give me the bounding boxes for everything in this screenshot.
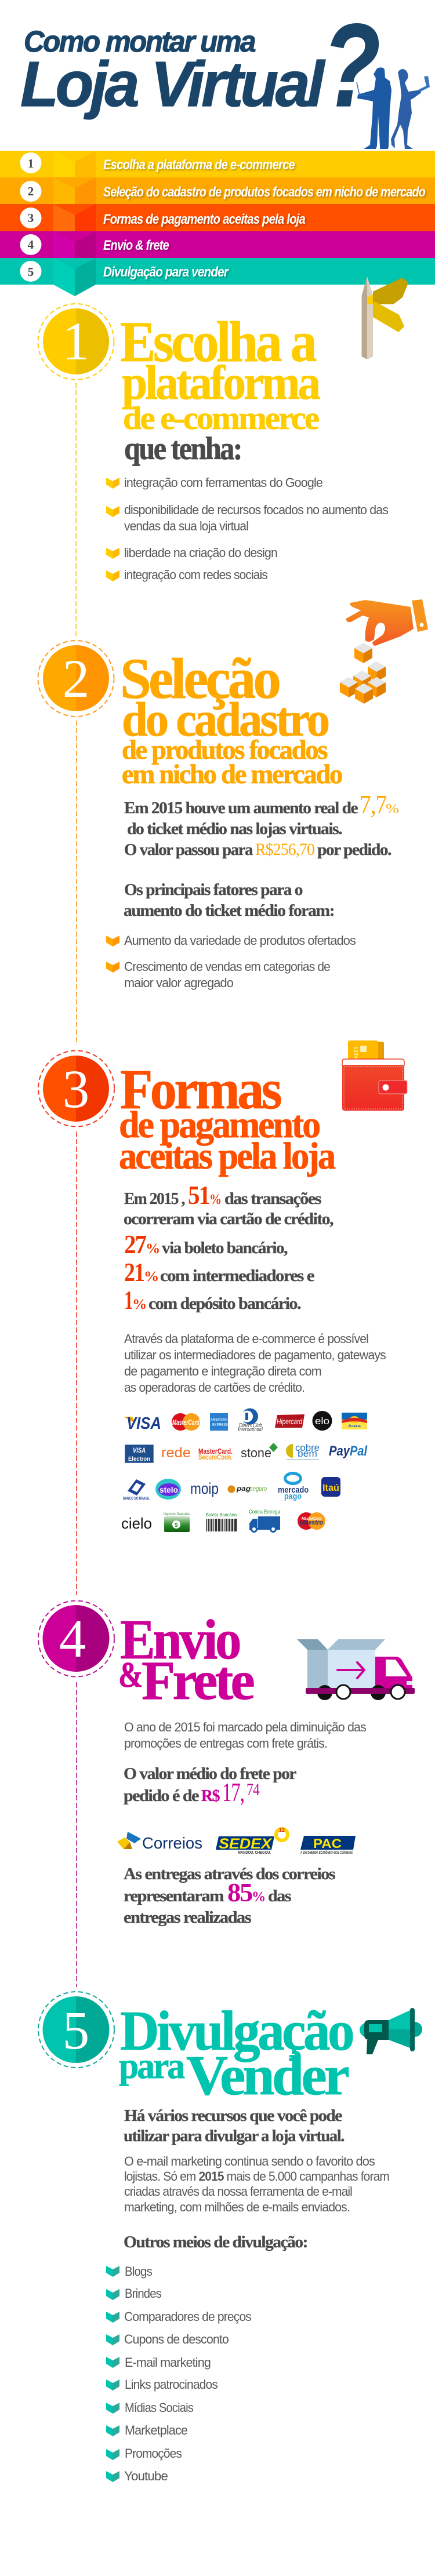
icon: delivery truck [297,1639,415,1700]
logo: Sedex: 12 [279,1827,285,1833]
freight value: 74 [246,1780,260,1799]
stats paragraph: 1 [124,1285,132,1315]
logo: Hipercard [275,1414,304,1428]
badge 5: 5 [63,2001,89,2061]
logo: PAC [300,1836,356,1855]
body text 3: de pagamento e integração direta com [124,1364,321,1378]
band 4: Envio & frete [103,238,169,253]
heading 1 [120,310,320,466]
logo: PAC: A ENCOMENDA ECONÔMICA DOS CORREIOS [300,1850,353,1855]
body text 3 [124,1331,386,1395]
logo: Sedex: SEDEX [219,1836,272,1852]
logo: Mercado Pago: pago [284,1491,302,1501]
logo: PagSeguro: pag [236,1485,251,1493]
badge 4 [38,1601,114,1676]
correios stat: % [252,1889,265,1905]
icon: megaphone [360,2008,422,2054]
panel: section 5 [38,1992,422,2483]
logo: American Express: EXPRESS [212,1423,228,1427]
logo: Diners Club: International [237,1426,263,1433]
logo: MasterCard SecureCode [198,1447,233,1461]
band 4 [0,231,435,269]
logo: Itau: Itaú [322,1482,339,1493]
paragraph: ticket medio [124,790,399,920]
freight value: 17, [222,1777,244,1807]
band 1 [0,151,435,188]
icon: signpost [362,276,408,359]
body text 3: as operadoras de cartões de crédito. [124,1380,304,1395]
list 1: integração com redes sociais [124,567,268,582]
stats paragraph: % [209,1192,221,1207]
band 5: Divulgação para vender [103,264,229,280]
logo: MasterCard [172,1413,200,1431]
logo: Maestro: MasterCard [302,1517,322,1521]
heading 4 [118,1609,254,1711]
logo: Banco do Brasil [123,1479,150,1501]
subheading 5: Outros meios de divulgação: [124,2233,307,2251]
panel: section 4 [38,1601,415,1927]
panel: section 1 [38,304,389,582]
paragraph: ticket medio: aumento do ticket médio foram: [124,901,334,920]
logo: Deposito Bancario [164,1513,190,1532]
heading 5: Vender [186,2044,349,2106]
logo: Visa Electron: VISA [133,1446,146,1454]
heading 1: que tenha: [124,431,241,466]
heading 2: Seleção [120,646,280,711]
logo: PayPal [329,1443,368,1459]
freight value: pedido é de [124,1787,200,1805]
body text 5 [124,2154,389,2214]
stats paragraph: 21 [124,1257,144,1287]
band 5: 5 [28,265,34,279]
logo: Hipercard: Hipercard [277,1417,303,1426]
logo: Sedex [216,1827,288,1855]
logo: PagSeguro [227,1485,267,1493]
stats paragraph: ocorreram via cartão de crédito, [124,1210,334,1228]
badge 1: 1 [63,312,89,372]
list 5: E-mail marketing [125,2355,211,2370]
title line: Como montar uma: Como montar uma [24,25,255,58]
logo: Banco do Brasil: BANCO DO BRASIL [123,1497,150,1501]
freight value: O valor médio do frete por [124,1764,297,1783]
paragraph: ticket medio: Os principais fatores para o [124,881,303,899]
icon: people with laptops [357,67,430,149]
list 5 [106,2264,252,2483]
list 2 [106,933,356,990]
logo: elo: elo [315,1416,329,1427]
paragraph: ticket medio: Em 2015 houve um aumento real de [124,799,358,817]
band 2: 2 [28,184,34,198]
heading 5 [119,2000,353,2106]
logo: Correios: Correios [142,1834,202,1852]
heading 3: Formas [120,1058,281,1120]
paragraph: ticket medio: R$256,70 [255,840,314,859]
body text 4: promoções de entregas com frete grátis. [124,1736,327,1751]
logo: PayPal: Pal [350,1443,368,1459]
logo: Boleto Bancario [206,1512,237,1531]
badge 2 [38,641,114,716]
correios stat: entregas realizadas [124,1908,251,1927]
list 2: maior valor agregado [124,976,234,990]
heading 5: Divulgação [120,2000,353,2062]
heading 4: Frete [142,1650,254,1711]
heading 2 [120,646,342,789]
title [20,0,380,132]
paragraph: ticket medio: 7,7 [360,790,387,819]
list 5: Youtube [124,2469,168,2483]
stats paragraph: Em 2015 , [124,1189,185,1208]
logo: cobre bem: bem [298,1448,317,1459]
logo: Correios [117,1832,202,1852]
paragraph: ticket medio: O valor passou para [124,841,253,859]
logo: Visa: VISA [126,1414,161,1433]
logo: stelo [155,1479,181,1500]
list 5: Links patrocinados [125,2377,218,2392]
stats paragraph: % [132,1297,146,1312]
intro 5 [124,2106,344,2145]
section 3 connector line [76,1131,77,1595]
list 5: Comparadores de preços [124,2309,252,2324]
heading 4: & [118,1656,142,1695]
stats paragraph [124,1180,334,1315]
list 1 [106,475,389,582]
intro 5: utilizar para divulgar a loja virtual. [124,2127,344,2145]
freight value [124,1764,297,1807]
band 5 [0,258,435,296]
list 1: liberdade na criação do design [124,545,277,560]
band 2 [0,177,435,215]
index bands [0,151,435,296]
logo: MasterCard SecureCode: MasterCard. [198,1447,233,1456]
correios stat: As entregas através dos correios [124,1865,335,1883]
heading 1: Escolha a [120,310,317,374]
list 1: vendas da sua loja virtual [124,519,248,533]
badge 5 [38,1992,114,2068]
heading 2: do cadastro [122,693,328,747]
icon: hand and cubes [340,599,428,704]
stats paragraph: via boleto bancário, [162,1239,288,1257]
heading 4: Envio [120,1609,240,1671]
logo: Mercado Pago [278,1472,309,1501]
logo: stelo: stelo [160,1485,178,1494]
band 4: 4 [28,238,34,252]
band 3 [0,204,435,242]
stats paragraph: das transações [224,1189,321,1208]
stats paragraph: 27 [124,1229,146,1259]
list 2: Crescimento de vendas em categorias de [124,959,331,974]
logo: Diners Club [237,1409,263,1433]
logo: Aura [342,1413,367,1429]
list 5: Mídias Sociais [125,2400,194,2415]
heading 2: de produtos focados [122,735,328,765]
badge 1 [38,304,114,380]
heading 3 [119,1058,335,1177]
logo: Itau [321,1477,340,1497]
logo: Deposito Bancario: $ [175,1522,178,1529]
logo: Contra Entrega: Contra Entrega [249,1509,280,1515]
logo: stone: stone [241,1446,271,1460]
logo: Deposito Bancario: Depósito Bancário [164,1513,190,1516]
list 5: Brindes [125,2286,162,2301]
stats paragraph: com intermediadores e [160,1267,315,1285]
logo: American Express [210,1413,228,1431]
stats paragraph: com depósito bancário. [148,1294,300,1313]
title line: Loja Virtual: Loja Virtual [20,49,326,120]
logo: cobre bem [286,1442,320,1460]
freight value: R$ [201,1787,220,1805]
stats paragraph: % [146,1241,160,1257]
badge 4: 4 [59,1609,86,1669]
logo: Visa Electron: Electron [128,1456,150,1462]
band 1: Escolha a plataforma de e-commerce [103,157,295,173]
stats paragraph: % [144,1269,158,1285]
logo: PagSeguro: seguro [250,1485,267,1493]
logo: Contra Entrega [249,1509,280,1531]
body text 3: Através da plataforma de e-commerce é possível [124,1331,368,1346]
logo: Boleto Bancario: Boleto Bancário [206,1512,237,1518]
list 1: disponibilidade de recursos focados no aumento das [124,503,389,517]
list 2: Aumento da variedade de produtos ofertados [124,933,356,948]
stats paragraph: 51 [188,1180,209,1210]
section 2 connector line [76,721,77,1045]
panel: section 3 [38,1050,386,1532]
paragraph: ticket medio: do ticket médio nas lojas virtuais. [127,820,342,838]
body text 4 [124,1720,367,1751]
body text 5: marketing, com milhões de e-mails enviados. [124,2200,350,2214]
payment logos [121,1409,368,1532]
list 1: integração com ferramentas do Google [124,475,323,490]
logo: moip: moip [190,1480,219,1497]
band 3: Formas de pagamento aceitas pela loja [103,212,306,227]
heading 3: aceitas pela loja [119,1135,335,1177]
logo: cielo: cielo [121,1515,152,1532]
logo: cobre bem: cobre [295,1442,320,1453]
body text 5: lojistas. Só em 2015 mais de 5.000 campanhas foram [124,2169,389,2184]
logo: Visa Electron [125,1445,153,1463]
heading 5: para [119,2045,185,2086]
badge 3: 3 [63,1060,89,1119]
heading 1: plataforma [122,356,320,410]
logo: PayPal: Pay [329,1443,350,1459]
body text 5: criadas através da nossa ferramenta de e-mail [124,2184,352,2199]
heading 1: de e-commerce [123,401,319,436]
badge 2: 2 [63,649,89,709]
intro 5: Há vários recursos que você pode [124,2106,343,2125]
correios stat: das [268,1887,291,1905]
list 5: Promoções [125,2446,182,2461]
icon: wallet with card [342,1040,407,1111]
logo: Maestro [298,1512,325,1530]
section 4 connector line [76,1682,77,1987]
list 5: Cupons de desconto [124,2332,229,2346]
logo: MasterCard SecureCode: SecureCode. [198,1453,233,1461]
list 5: Blogs [125,2264,153,2279]
body text 5: O e-mail marketing continua sendo o favorito dos [124,2154,375,2169]
icon: wallet with card: 1234 12 [353,1046,358,1068]
logo: Maestro: Maestro [300,1519,323,1526]
correios stat [124,1865,335,1927]
logo: Sedex: MANDOU, CHEGOU. [238,1851,271,1855]
band 3: 3 [28,211,34,225]
heading 3: de pagamento [119,1104,320,1146]
correios stat: 85 [227,1878,252,1907]
correios stat: representaram [124,1887,224,1905]
body text 4: O ano de 2015 foi marcado pela diminuição das [124,1720,367,1734]
list 5: Marketplace [125,2423,188,2437]
logo: PAC: PAC [313,1836,342,1851]
section 1 connector line [75,383,77,636]
logo: Aura: Aura [348,1425,361,1428]
logo: MasterCard: MasterCard [172,1418,200,1427]
badge 3 [38,1050,114,1127]
band 1: 1 [28,157,34,170]
title question mark: ? [322,0,380,132]
body text 3: utilizar os intermediadores de pagamento, gateways [124,1348,386,1362]
logo: elo [312,1411,332,1431]
heading 2: em nicho de mercado [122,759,342,789]
logo: American Express: AMERICAN [211,1418,227,1422]
panel: section 2 [38,641,399,990]
paragraph: ticket medio: % [386,802,399,817]
logo: rede: rede [161,1445,191,1461]
logo: Diners Club: Diners Club [238,1422,262,1429]
paragraph: ticket medio: por pedido. [317,841,391,859]
logo: Mercado Pago: mercado [278,1485,309,1495]
